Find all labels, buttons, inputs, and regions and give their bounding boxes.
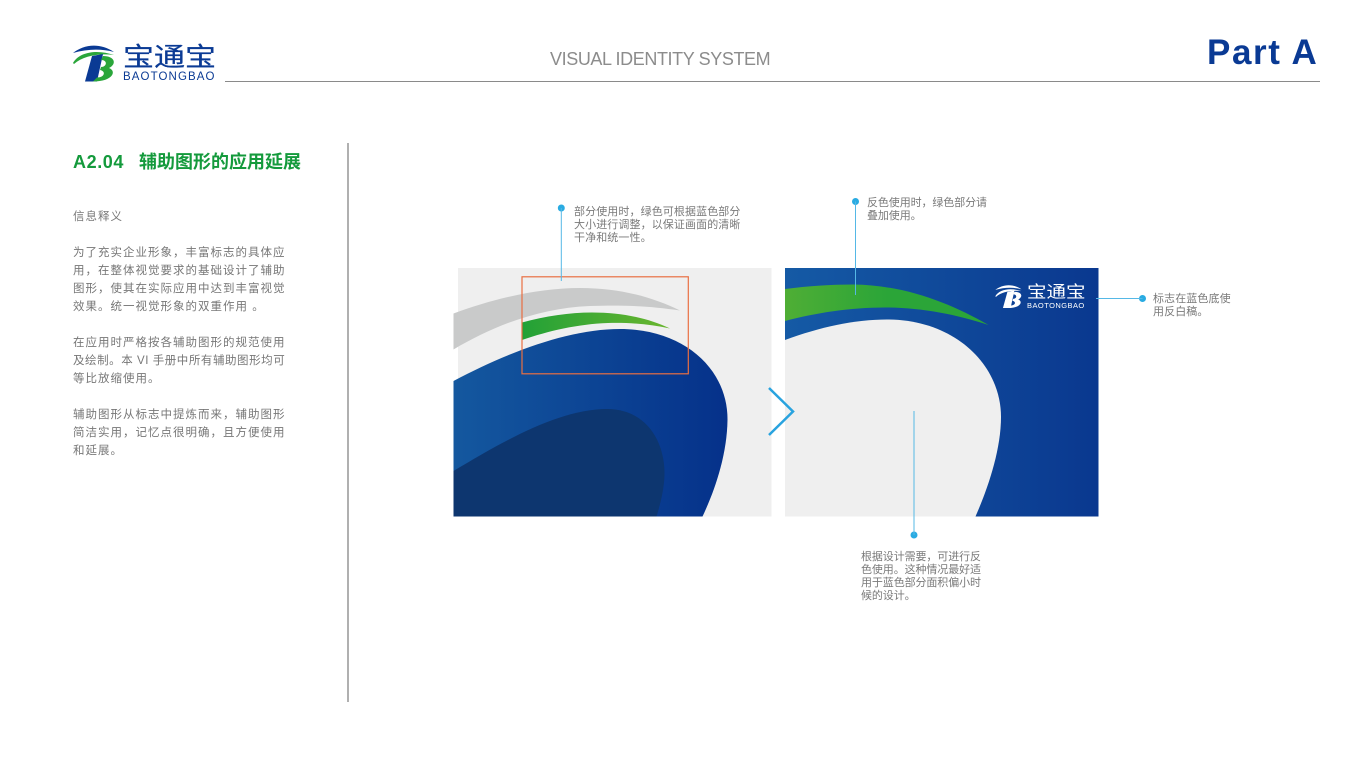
callout text: reversed overlay [867,196,987,222]
body text: 图形，使其在实际应用中达到丰富视觉 [73,283,286,295]
grey swoosh [454,288,680,350]
body text: 及绘制。本 VI 手册中所有辅助图形均可 [73,355,285,367]
logo latin name: BAOTONGBAO [123,70,216,82]
body text: 信息释义 [73,211,123,223]
body text: 等比放缩使用。 [73,373,160,385]
icon: TB logo mark [73,46,114,82]
dark blue shape [454,409,665,516]
callout text: partial use [574,206,740,244]
callout text: reversed use: 候的设计。 [861,590,916,602]
body text: 在应用时严格按各辅助图形的规范使用 [73,337,286,349]
callout text: partial use: 部分使用时，绿色可根据蓝色部分 [574,206,740,218]
body text [73,210,286,457]
section heading: 辅助图形的应用延展 [139,152,301,172]
logo wordmark: 宝通宝 [123,42,216,72]
white wordmark: 宝通宝 [1027,283,1086,301]
reversed white logo [995,283,1086,310]
body text: 用，在整体视觉要求的基础设计了辅助 [73,265,286,277]
reversed light shape [785,320,1001,516]
callout text: reversed use [861,550,981,602]
reversed green swoosh [785,284,988,325]
callout text: reversed overlay: 叠加使用。 [867,210,922,222]
callout text: partial use: 干净和统一性。 [574,232,652,244]
body text: 效果。统一视觉形象的双重作用 。 [73,301,265,313]
part label: Part A [1207,33,1318,72]
icon: white TB mark [995,285,1022,308]
body text: 为了充实企业形象，丰富标志的具体应 [73,247,286,259]
body text: 简洁实用，记忆点很明确，且方便使用 [73,427,286,439]
body text: 辅助图形从标志中提炼而来，辅助图形 [73,409,286,421]
header logo [73,42,216,82]
blue shape [454,329,728,516]
callout text: white logo [1153,292,1231,318]
callout text: reversed overlay: 反色使用时，绿色部分请 [867,197,987,209]
orange frame [522,277,688,374]
callout text: reversed use: 色使用。这种情况最好适 [861,564,981,576]
body text: 和延展。 [73,445,123,457]
callout text: white logo: 用反白稿。 [1153,306,1208,318]
callout text: reversed use: 用于蓝色部分面积偏小时 [861,577,981,589]
white latin name: BAOTONGBAO [1027,301,1085,310]
header title: VISUAL IDENTITY SYSTEM [550,49,770,69]
callout text: white logo: 标志在蓝色底使 [1153,293,1231,305]
callout text: partial use: 大小进行调整，以保证画面的清晰 [574,219,740,231]
section heading: A2.04 [73,152,124,172]
green swoosh [522,312,670,340]
callout text: reversed use: 根据设计需要，可进行反 [861,551,981,563]
